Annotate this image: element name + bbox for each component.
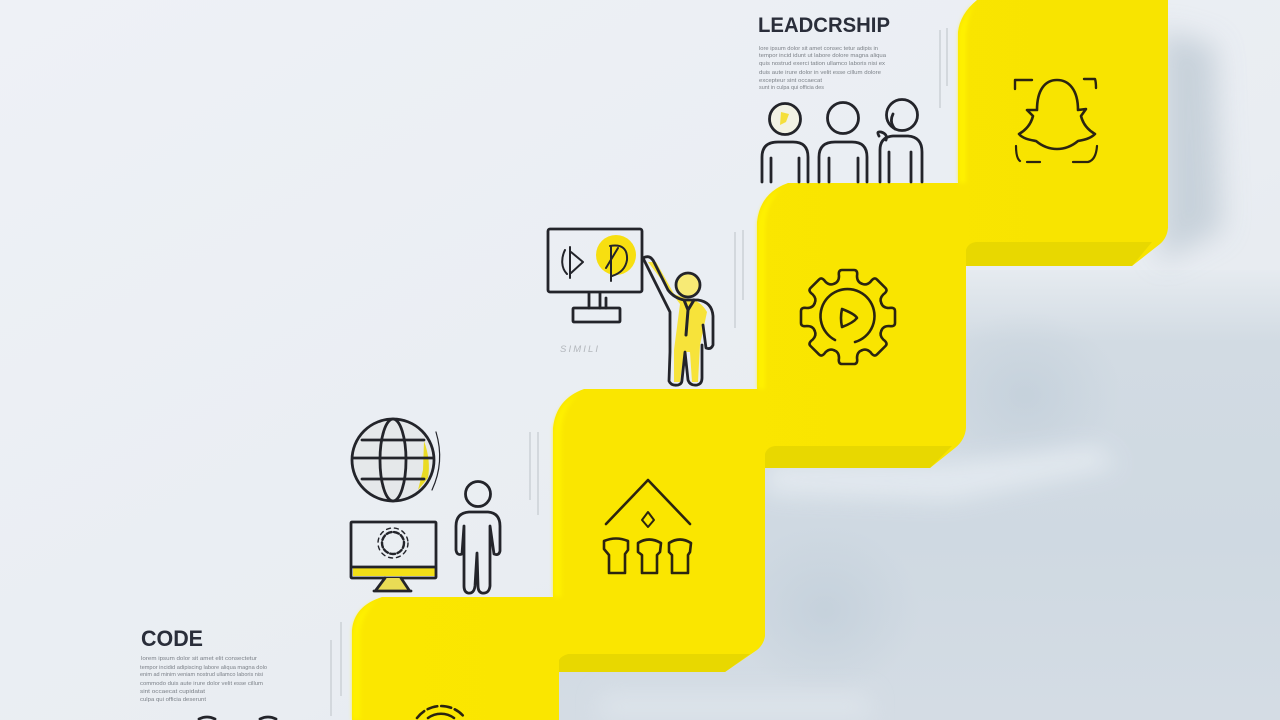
text block: code: enim ad minim veniam nostrud ullamco laboris nisi bbox=[140, 672, 263, 678]
stair side band 4 bbox=[966, 242, 1152, 266]
text block: leadership: quis nostrud exerci tation ullamco laboris nisi ex bbox=[759, 61, 885, 67]
stair side band 3 bbox=[765, 446, 952, 468]
stair highlight bbox=[353, 4, 974, 720]
icon: globe bbox=[352, 419, 440, 501]
text block: code: tempor incidid adipiscing labore aliqua magna dolo bbox=[140, 665, 267, 671]
label: presenter caption: SIMILI bbox=[560, 344, 598, 355]
icon: house with shirts bbox=[604, 480, 691, 573]
stair solid bbox=[352, 0, 1168, 720]
decorative rules bbox=[331, 28, 947, 716]
icon: three people bbox=[762, 100, 922, 182]
icon: gear with play bbox=[801, 270, 895, 364]
text block: leadership bbox=[759, 46, 886, 91]
icon: lower gear bbox=[417, 706, 465, 718]
text block: code: lorem ipsum dolor sit amet elit consectetur bbox=[141, 656, 257, 662]
text block: leadership: tempor incid idunt ut labore dolore magna aliqua bbox=[759, 53, 886, 59]
icon: lower people heads bbox=[199, 717, 276, 719]
text block: code: culpa qui officia deserunt bbox=[140, 697, 207, 703]
text block: leadership: lore ipsum dolor sit amet consec tetur adipis in bbox=[759, 46, 878, 52]
text block: code bbox=[140, 656, 267, 703]
text block: leadership: excepteur sint occaecat bbox=[759, 78, 823, 84]
stair shadows bbox=[559, 30, 1280, 720]
heading: leadership: LEADCRSHIP bbox=[758, 14, 890, 37]
icon: presenter bbox=[643, 257, 713, 385]
text block: code: commodo duis aute irure dolor velit esse cillum bbox=[140, 681, 264, 687]
icon: presentation monitor bbox=[548, 229, 642, 322]
text block: leadership: duis aute irure dolor in velit esse cillum dolore bbox=[759, 70, 881, 76]
icon: desktop computer bbox=[351, 522, 436, 591]
staircase bbox=[352, 0, 1168, 720]
stair side band 2 bbox=[559, 654, 750, 672]
heading: code: CODE bbox=[141, 626, 203, 651]
text block: code: sint occaecat cupidatat bbox=[140, 689, 206, 695]
icon: standing person bbox=[456, 482, 500, 593]
text block: leadership: sunt in culpa qui officia des bbox=[759, 85, 824, 91]
icon: snapchat ghost bbox=[1015, 79, 1097, 162]
